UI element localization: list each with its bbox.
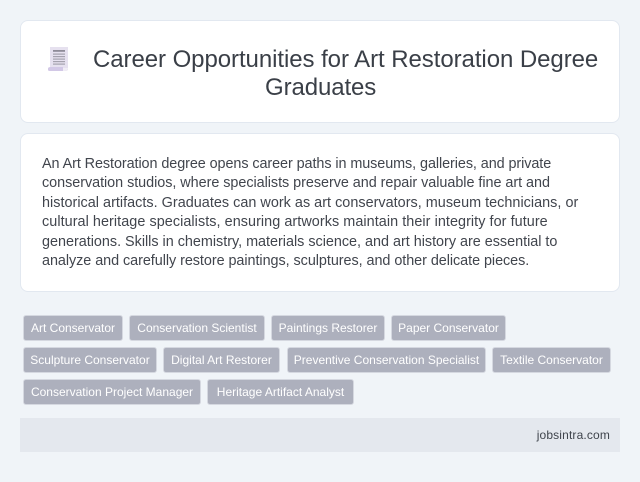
description panel (20, 133, 620, 292)
tag: Paintings Restorer (271, 315, 385, 341)
tag: Digital Art Restorer: Digital Art Restorer (171, 353, 272, 367)
tag: Paper Conservator: Paper Conservator (398, 321, 499, 335)
description text: An Art Restoration degree opens career paths in museums, galleries, and private (42, 156, 551, 172)
tag: Textile Conservator (492, 347, 611, 373)
description text: generations. Skills in chemistry, materials science, and art history are essential to (42, 234, 557, 250)
tag: Sculpture Conservator (23, 347, 157, 373)
tag: Conservation Scientist (129, 315, 265, 341)
tag: Conservation Scientist: Conservation Scientist (137, 321, 257, 335)
tag: Paper Conservator (391, 315, 506, 341)
title line 1: Career Opportunities for Art Restoration Degree (93, 46, 598, 73)
tag: Heritage Artifact Analyst (207, 379, 354, 405)
description text: conservation studios, where specialists preserve and repair valuable fine art and (42, 175, 550, 191)
tag: Conservation Project Manager: Conservation Project Manager (31, 385, 193, 399)
footer bar (20, 418, 620, 452)
tag: Digital Art Restorer (163, 347, 280, 373)
description text: cultural heritage specialists, ensuring artworks maintain their integrity for future (42, 214, 548, 230)
header panel (20, 20, 620, 123)
tag: Art Conservator (23, 315, 123, 341)
tag: Paintings Restorer: Paintings Restorer (279, 321, 377, 335)
description text (42, 156, 578, 269)
tag: Preventive Conservation Specialist (287, 347, 486, 373)
description text: analyze and carefully restore paintings, sculptures, and other delicate pieces. (42, 253, 529, 269)
tag: Heritage Artifact Analyst: Heritage Artifact Analyst (217, 385, 344, 399)
icon: paper scroll (48, 47, 68, 71)
description text: historical artifacts. Graduates can work as art conservators, museum technicians, or (42, 195, 578, 211)
tag: Sculpture Conservator: Sculpture Conservator (30, 353, 150, 367)
tag: Textile Conservator: Textile Conservator (500, 353, 603, 367)
tag: Art Conservator: Art Conservator (31, 321, 115, 335)
career tags (23, 315, 611, 405)
tag: Conservation Project Manager (23, 379, 201, 405)
title line 2: Graduates (265, 74, 376, 101)
footer site name: jobsintra.com (537, 428, 610, 442)
tag: Preventive Conservation Specialist: Preventive Conservation Specialist (294, 353, 479, 367)
